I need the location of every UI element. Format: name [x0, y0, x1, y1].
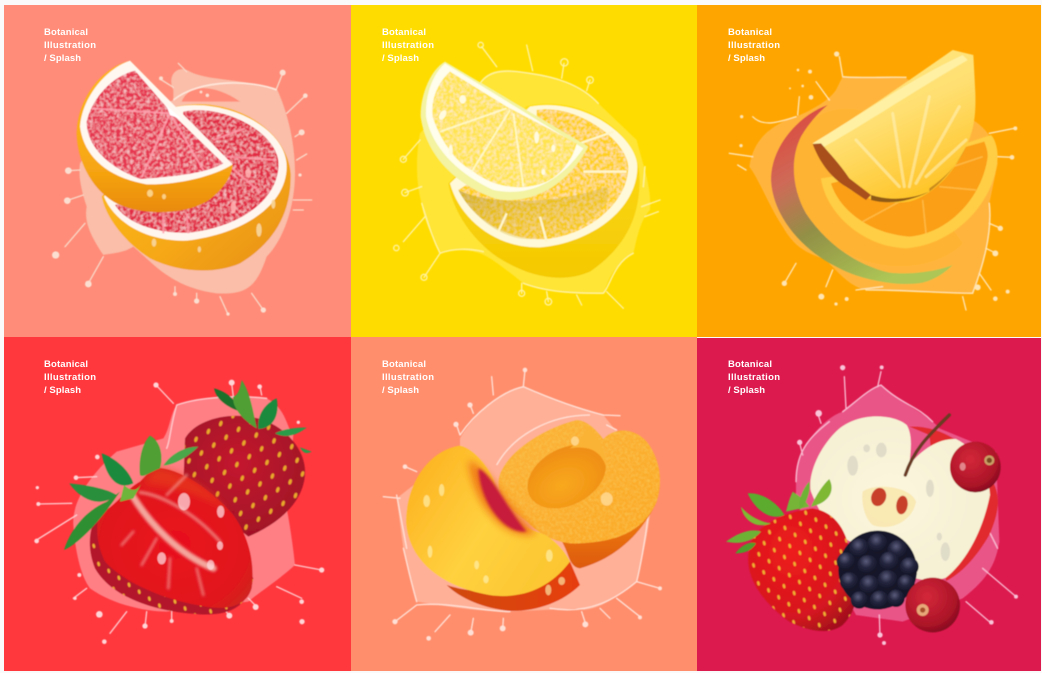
panel background: orange: [697, 5, 1041, 337]
cranberry: bottom: [905, 578, 960, 632]
panel: mixed berries and apple: [697, 338, 1041, 671]
caption: / Splash: [382, 385, 419, 396]
panel background: peach: [351, 337, 697, 671]
blackberry: [837, 531, 919, 609]
caption: / Splash: [44, 53, 81, 64]
panel background: yellow: [351, 5, 697, 337]
illustration: strawberries with splash: [34, 380, 324, 644]
cut strawberry: [64, 436, 253, 614]
illustration: apple, strawberry, blackberry and cranberries with splash: [726, 365, 1018, 645]
caption: [728, 359, 780, 396]
leaves: [214, 380, 312, 453]
illustration: lemon with splash: [394, 42, 660, 308]
caption: Botanical: [44, 27, 88, 38]
juice splash: [729, 51, 1017, 310]
caption: Illustration: [44, 40, 96, 51]
juice droplets on rind: [152, 169, 275, 252]
lower grapefruit half: [102, 104, 291, 270]
caption: / Splash: [382, 53, 419, 64]
illustration: grapefruit with splash: [52, 61, 312, 316]
juice splash: [34, 380, 324, 644]
juice splash: [394, 42, 660, 308]
caption: / Splash: [44, 385, 81, 396]
pineapple wedge: [813, 50, 975, 203]
leaves: [726, 479, 832, 553]
leaves: [64, 436, 198, 550]
illustration: pineapple, orange and mango with splash: [729, 50, 1017, 310]
caption: / Splash: [728, 53, 765, 64]
caption: Botanical: [44, 359, 88, 370]
panel background: crimson: [697, 338, 1041, 671]
panel: lemon: [351, 5, 697, 337]
panel: peach and apricot: [351, 337, 697, 671]
juice splash: [796, 365, 1018, 645]
mango peel ribbon: [771, 105, 953, 284]
caption: [44, 359, 96, 396]
panel background: red: [4, 337, 351, 671]
caption: Illustration: [728, 372, 780, 383]
caption: Botanical: [382, 359, 426, 370]
back strawberry: [183, 380, 312, 537]
apricot half: [498, 420, 660, 568]
caption: [44, 27, 96, 64]
lower lemon half: [448, 104, 640, 278]
panel background: salmon: [4, 5, 351, 337]
caption: [728, 27, 780, 64]
caption: [382, 27, 434, 64]
juice splash: [52, 63, 312, 316]
caption: Illustration: [728, 40, 780, 51]
panel: grapefruit: [4, 5, 351, 337]
caption: Botanical: [728, 27, 772, 38]
juice splash: [383, 368, 662, 641]
caption: Illustration: [382, 372, 434, 383]
caption: Illustration: [382, 40, 434, 51]
caption: Illustration: [44, 372, 96, 383]
caption: Botanical: [728, 359, 772, 370]
caption: [382, 359, 434, 396]
strawberry: [726, 479, 856, 631]
apple half: [810, 415, 998, 581]
caption: / Splash: [728, 385, 765, 396]
illustration: peach slice and apricot with splash: [383, 368, 662, 641]
panel: pineapple, orange, mango: [697, 5, 1041, 337]
orange half slice: [821, 135, 998, 248]
panel: strawberries: [4, 337, 351, 671]
lemon wedge: [421, 62, 588, 200]
cranberry: upper right: [950, 442, 1001, 492]
grapefruit wedge: [77, 61, 233, 212]
caption: Botanical: [382, 27, 426, 38]
peach slice: [406, 446, 580, 611]
